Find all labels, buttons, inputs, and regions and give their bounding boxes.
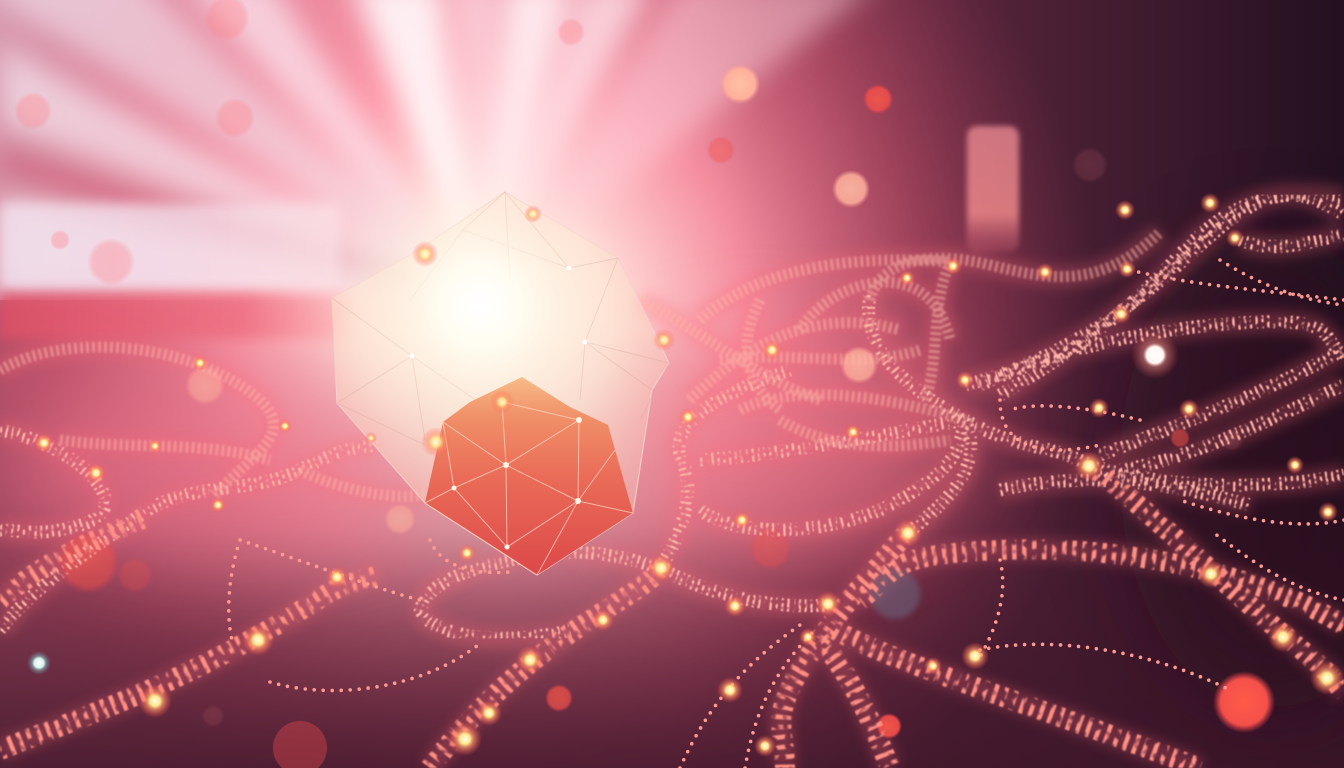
gem vertices [452, 417, 582, 550]
particle strand glow [0, 195, 1344, 768]
large transparent crystal [332, 192, 669, 575]
gem facet lines [425, 402, 633, 575]
crystal vertex points [410, 266, 588, 358]
red gem [425, 377, 633, 575]
particle strands: mid ribbons [0, 195, 1344, 638]
red horizontal band [0, 293, 350, 339]
particle strands: near ribbons [0, 465, 1344, 768]
particle strands: far blurred ribbons [0, 232, 1160, 496]
central white glow [330, 155, 630, 455]
light rays [0, 0, 880, 300]
vertical light bar [967, 126, 1019, 252]
glowing nodes [34, 193, 1344, 757]
pale horizontal light band [0, 204, 340, 290]
crystal vertex sparkles [365, 205, 675, 457]
crystal facet lines [332, 192, 669, 445]
particle strands: loose dotted lines [229, 260, 1344, 768]
